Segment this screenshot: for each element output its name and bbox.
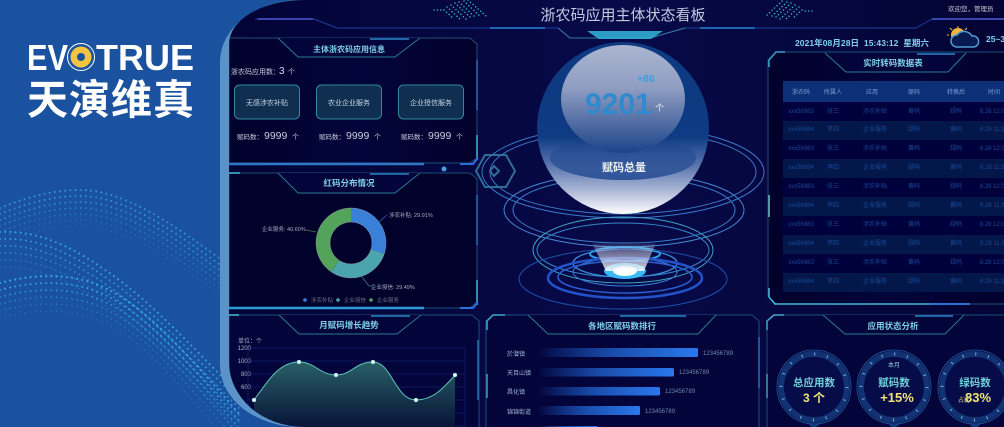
header dots left: [434, 0, 486, 19]
table rows: 黄码: [908, 107, 920, 115]
logo: Chinese name: 天演维真: [27, 77, 194, 123]
table rows: 涉农补贴: [863, 220, 887, 228]
table rows: 企业服务: [863, 277, 887, 285]
table rows: 李四: [827, 239, 839, 247]
table header: 转换后: [947, 88, 965, 96]
card: subsidy: [234, 85, 300, 119]
y axis labels: 800: [241, 372, 252, 378]
card count 2: 9999: [346, 130, 370, 142]
table rows: 企业服务: [863, 239, 887, 247]
y axis labels: 1000: [238, 359, 252, 365]
table rows: 绿码: [950, 107, 962, 115]
total value: 9201: [585, 88, 652, 121]
table header: 浙农码: [792, 88, 810, 96]
base glow: [604, 263, 646, 279]
table rows: 张三: [827, 107, 839, 115]
card: credit services: 企业授信服务: [410, 98, 452, 107]
panel: applications info: 3: [279, 66, 285, 77]
table rows: 黄码: [908, 144, 920, 152]
donut labels: 企业服务: 40.60%: [262, 225, 306, 233]
table rows: xxx56983: [788, 146, 815, 152]
table header: 时间: [988, 88, 1000, 96]
date and time: 2021年08月28日 15:43:12 星期六: [795, 38, 929, 48]
gauge: green codes: 绿码数: [959, 376, 991, 389]
sphere upper highlight: [561, 45, 685, 153]
table rows: 绿码: [908, 239, 920, 247]
logo: EVOTRUE wordmark: EV: [27, 37, 68, 78]
table rows: 李四: [827, 201, 839, 209]
bar chart: 昌化镇: [507, 388, 525, 396]
table rows: xxx56984: [788, 203, 815, 209]
sphere lower disc: [550, 148, 696, 180]
gauge: codes: 本月: [888, 361, 900, 369]
area line: [254, 362, 455, 400]
table rows: 绿码: [908, 201, 920, 209]
table rows: xxx56983: [788, 260, 815, 266]
panel heading: 各地区赋码数排行: [588, 321, 656, 331]
table rows: xxx56984: [788, 127, 815, 133]
header dots right: [766, 1, 812, 19]
table rows: xxx56984: [788, 279, 815, 285]
table header: 所属人: [824, 88, 842, 96]
table rows: 绿码: [908, 277, 920, 285]
panel heading: 实时转码数据表: [863, 58, 923, 68]
hexagon connector: [476, 155, 515, 187]
y axis labels: 600: [241, 385, 252, 391]
light cone: [592, 243, 656, 271]
table rows: 涉农补贴: [863, 107, 887, 115]
card count 3: [401, 132, 463, 140]
table rows: 张三: [827, 182, 839, 190]
gauge: codes: [857, 350, 931, 427]
panel heading: 主体浙农码应用信息: [313, 44, 385, 54]
panel: monthly growth trend: [229, 315, 479, 427]
card count 3: 9999: [428, 130, 452, 142]
table rows: 涉农补贴: [863, 258, 887, 266]
bar chart: [507, 348, 734, 427]
donut labels: [262, 211, 433, 291]
table header: 原码: [908, 88, 920, 96]
gauge: green codes: 83%: [965, 390, 991, 405]
table header: [783, 81, 1004, 102]
user greeting: 欢迎您，管理员: [948, 4, 994, 13]
connector dot: [442, 166, 446, 172]
card: subsidy: 无感涉农补贴: [246, 98, 288, 107]
title lamp: [587, 31, 663, 39]
donut legend: 涉农补贴: [311, 296, 334, 304]
card count 1: 赋码数：: [237, 132, 263, 141]
unit label: 单位：个: [238, 337, 262, 345]
y axis labels: 1200: [238, 346, 252, 352]
table rows: 黄码: [908, 182, 920, 190]
bar chart: 123456789: [645, 409, 676, 415]
y axis labels: [238, 346, 252, 391]
donut leader lines: [306, 215, 387, 286]
donut legend: [303, 296, 399, 303]
gauge: codes: +15%: [880, 390, 914, 405]
card count 1: 9999: [264, 130, 288, 142]
card: credit services: [398, 85, 464, 119]
donut chart: [316, 208, 386, 278]
panel heading: 红码分布情况: [323, 178, 375, 188]
bar chart: 天目山镇: [507, 369, 531, 377]
panel: applications info: 个: [288, 68, 295, 76]
table rows: xxx56983: [788, 184, 815, 190]
table rows: 绿码: [908, 163, 920, 171]
table header: 应用: [866, 88, 878, 96]
bar chart: 於潜镇: [507, 350, 525, 358]
gauge: total apps: 总应用数: [793, 376, 835, 389]
dashboard screenshot frame: [220, 0, 1004, 427]
bar chart: 锦锦街道: [507, 408, 531, 416]
table rows: xxx56983: [788, 222, 815, 228]
donut labels: 企业授信: 29.49%: [371, 283, 415, 291]
gauge: total apps: 3 个: [803, 391, 825, 405]
card count 3: 个: [456, 133, 463, 141]
panel: app status analysis: [767, 315, 1004, 427]
delta value: +86: [637, 73, 655, 85]
sphere body: [537, 42, 709, 214]
table rows: 黄码: [950, 277, 962, 285]
table rows: 绿码: [950, 220, 962, 228]
table rows: 黄码: [908, 220, 920, 228]
header lines: [255, 19, 1004, 38]
table rows: 李四: [827, 277, 839, 285]
logo: EVOTRUE wordmark: TRUE: [96, 37, 194, 78]
panel: realtime table: [768, 52, 1004, 304]
table rows: 张三: [827, 220, 839, 228]
table rows: 黄码: [950, 201, 962, 209]
panel: red code distribution: [229, 173, 478, 308]
data points: [252, 360, 457, 402]
gauge: green codes: [938, 350, 1004, 427]
icon: weather: [947, 26, 979, 47]
panel heading: 应用状态分析: [867, 321, 919, 331]
table rows: 黄码: [950, 125, 962, 133]
table rows: 张三: [827, 144, 839, 152]
unit: 个: [655, 103, 664, 113]
table rows: 涉农补贴: [863, 144, 887, 152]
center rings: [482, 126, 764, 309]
table rows: 企业服务: [863, 163, 887, 171]
table rows: 企业服务: [863, 125, 887, 133]
bar chart: 123456789: [703, 351, 734, 357]
app count: 浙农码应用数：: [231, 67, 280, 76]
table rows: 李四: [827, 163, 839, 171]
table rows: 黄码: [908, 258, 920, 266]
donut legend: 企业授信: [344, 296, 367, 304]
bar chart: 123456789: [665, 389, 696, 395]
panel: regional ranking: [486, 315, 759, 427]
dotted wave decoration: [0, 190, 240, 427]
card count 2: 个: [374, 133, 381, 141]
table rows: 绿码: [950, 258, 962, 266]
card count 3: 赋码数：: [401, 132, 427, 141]
dashboard screenshot: [229, 0, 1004, 427]
donut labels: 涉农补贴: 29.91%: [389, 211, 433, 219]
logo: [27, 37, 194, 123]
donut legend: 企业服务: [377, 296, 400, 304]
grid lines: [248, 348, 465, 427]
bar chart: 123456789: [679, 370, 710, 376]
card count 1: [237, 132, 299, 140]
table rows: 绿码: [950, 144, 962, 152]
table rows: xxx56983: [788, 109, 815, 115]
gauge: total apps: [777, 350, 851, 427]
card: agri services: 农业企业服务: [328, 98, 370, 107]
logo: EVOTRUE wordmark: [27, 37, 194, 78]
sphere: [537, 42, 709, 214]
table rows: 张三: [827, 258, 839, 266]
table rows: 黄码: [950, 163, 962, 171]
panel heading: 月赋码增长趋势: [319, 320, 379, 330]
card count 1: 个: [292, 133, 299, 141]
card: agri services: [316, 85, 382, 119]
table rows: 绿码: [950, 182, 962, 190]
card count 2: [319, 132, 381, 140]
table rows: 黄码: [950, 239, 962, 247]
table rows: xxx56984: [788, 165, 815, 171]
sphere label: 赋码总量: [602, 160, 646, 174]
table rows: 企业服务: [863, 201, 887, 209]
table rows: 绿码: [908, 125, 920, 133]
title: 浙农码应用主体状态看板: [540, 6, 706, 24]
table rows: 李四: [827, 125, 839, 133]
gauge: codes: 赋码数: [878, 376, 910, 389]
area chart: [254, 362, 455, 427]
card count 2: 赋码数：: [319, 132, 345, 141]
table rows: 涉农补贴: [863, 182, 887, 190]
table rows: xxx56984: [788, 241, 815, 247]
gauge: green codes: 占比: [958, 396, 970, 404]
table rows: [783, 102, 1004, 292]
panel: applications info: [229, 38, 478, 164]
